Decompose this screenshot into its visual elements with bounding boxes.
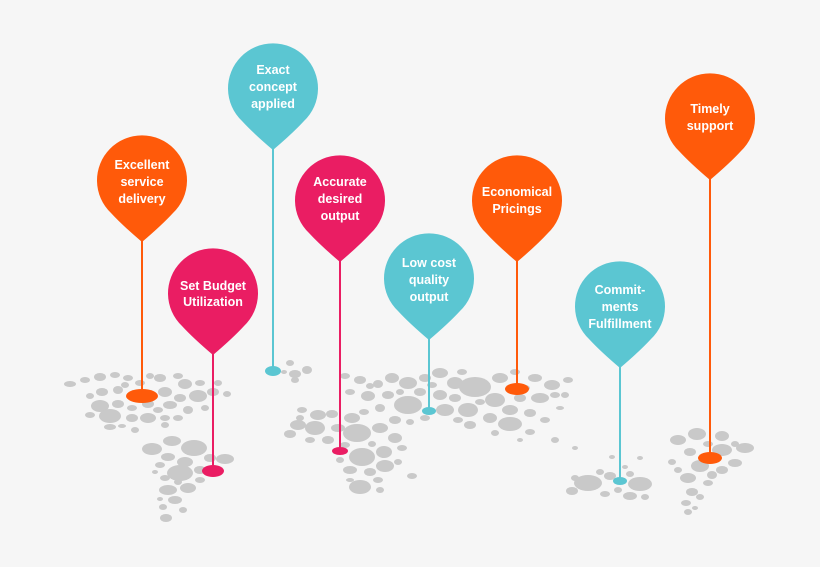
pin: Accurate desired output: output — [321, 209, 360, 223]
pin: Exact concept applied: concept — [249, 80, 298, 94]
pin: Low cost quality output — [384, 233, 474, 415]
world map dots — [64, 360, 754, 522]
pin: Excellent service delivery: service — [120, 175, 164, 189]
pin: Economical Pricings: Economical — [482, 185, 552, 199]
pin: Commitments Fulfillment — [575, 261, 665, 485]
pin: Exact concept applied: applied — [251, 97, 295, 111]
pin: Set Budget Utilization: Utilization — [183, 295, 243, 309]
pin: Low cost quality output: output — [410, 290, 449, 304]
pin: Excellent service delivery — [97, 135, 187, 403]
pin: Set Budget Utilization — [168, 248, 258, 477]
pin: Accurate desired output: desired — [318, 192, 362, 206]
pin: Economical Pricings — [472, 155, 562, 395]
pin: Set Budget Utilization: Set Budget — [180, 279, 247, 293]
pin: Timely support: support — [687, 119, 734, 133]
pin: Excellent service delivery: Excellent — [115, 158, 170, 172]
pin: Accurate desired output: Accurate — [313, 175, 367, 189]
pin: Timely support: Timely — [690, 102, 730, 116]
pin: Commitments Fulfillment: Fulfillment — [588, 317, 652, 331]
pin: Exact concept applied: Exact — [256, 63, 291, 77]
pin: Low cost quality output: quality — [409, 273, 449, 287]
pin: Excellent service delivery: delivery — [118, 192, 166, 206]
pin: Commitments Fulfillment: ments — [602, 300, 638, 314]
pin: Economical Pricings: Pricings — [492, 202, 542, 216]
pin: Low cost quality output: Low cost — [402, 256, 457, 270]
pin: Timely support — [665, 73, 755, 464]
pin: Commitments Fulfillment: Commit- — [595, 283, 645, 297]
pin: Accurate desired output — [295, 155, 385, 455]
pin: Exact concept applied — [228, 43, 318, 376]
